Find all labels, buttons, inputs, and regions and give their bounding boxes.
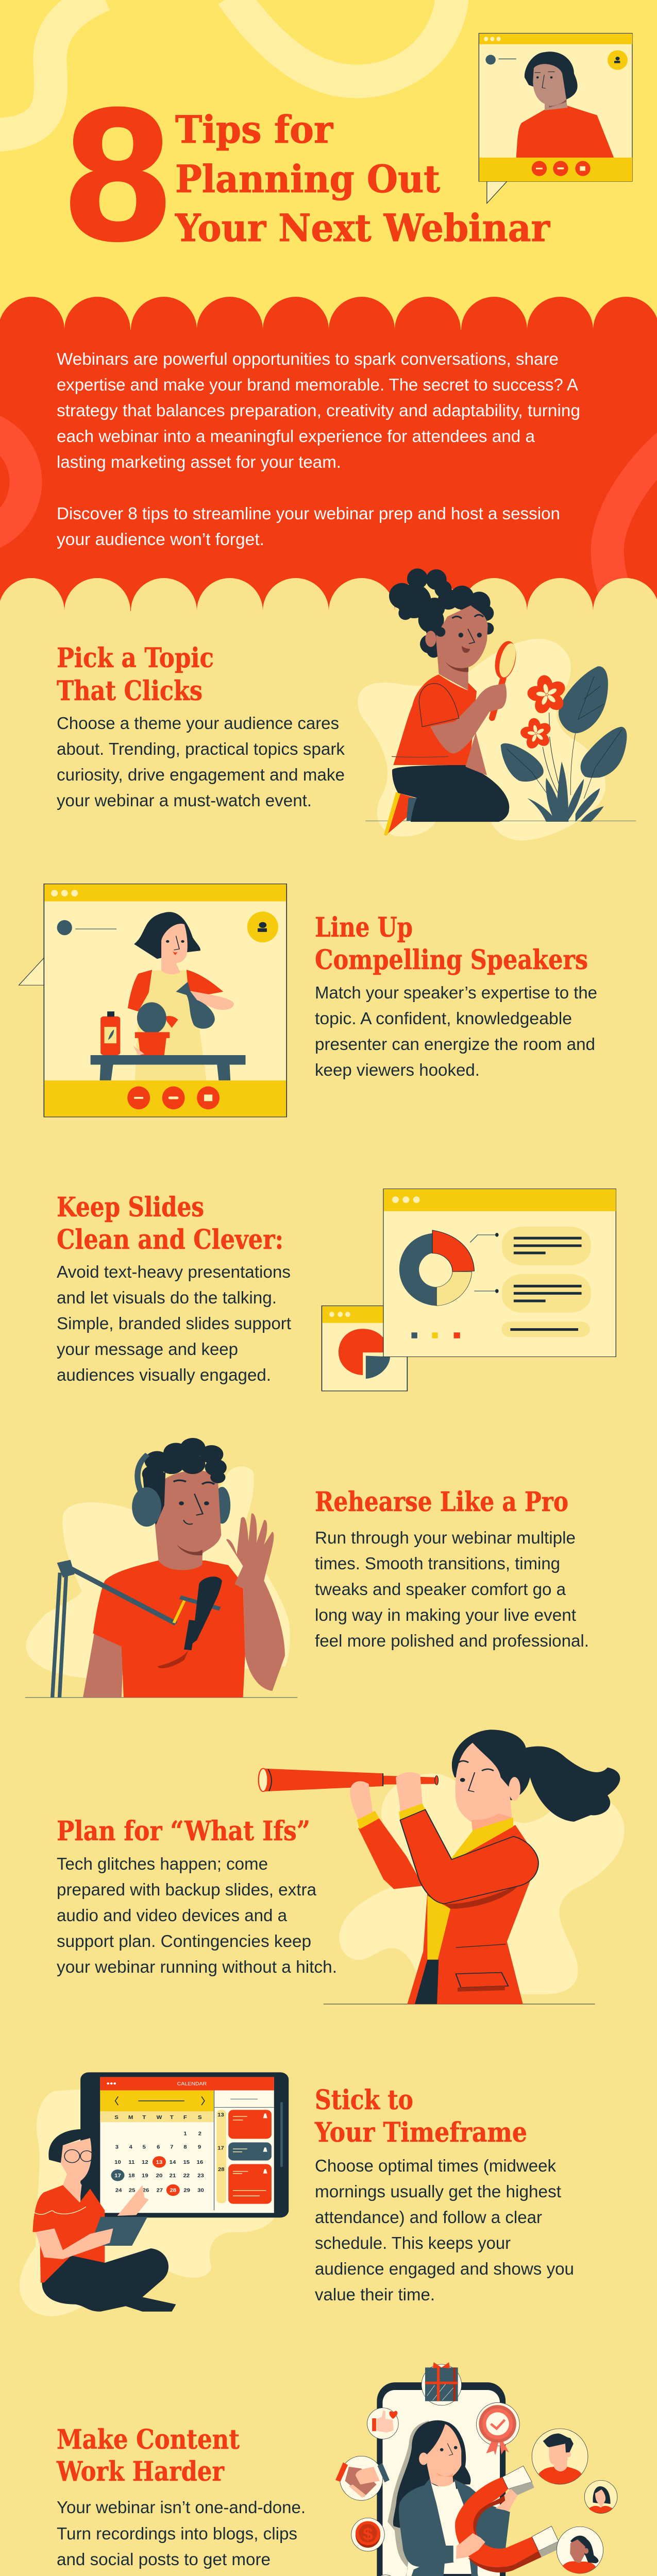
illustration: person with calendar tablet: 28	[218, 2167, 225, 2173]
illustration: person with calendar tablet: 18	[128, 2173, 135, 2179]
illustration: person with calendar tablet: 23	[197, 2173, 204, 2179]
illustration: person with calendar tablet: 13	[156, 2159, 162, 2165]
panel: header	[0, 0, 657, 330]
text: tip 4	[315, 1528, 589, 1650]
illustration: person with calendar tablet: W	[157, 2115, 162, 2121]
illustration: person with calendar tablet: 8	[183, 2144, 187, 2150]
text: tip 5: prepared with backup slides, extra	[57, 1880, 317, 1899]
illustration: person with calendar tablet: 6	[157, 2144, 160, 2150]
heading: tip 5: Plan for “What Ifs”	[57, 1816, 310, 1847]
text: tip 1: your webinar a must-watch event.	[57, 791, 312, 810]
illustration: person with calendar tablet: T	[170, 2115, 174, 2121]
text: tip 3: and let visuals do the talking.	[57, 1288, 277, 1307]
text: tip 5: Tech glitches happen; come	[57, 1854, 268, 1873]
illustration: person with calendar tablet: 30	[197, 2188, 204, 2193]
illustration: person with calendar tablet: 12	[142, 2159, 148, 2165]
icon: attendee man	[532, 2429, 588, 2484]
text: tip 2: topic. A confident, knowledgeable	[315, 1009, 572, 1028]
illustration: person with calendar tablet: T	[142, 2115, 146, 2121]
illustration: woman with magnifier and flowers	[358, 568, 636, 841]
text: tip 3: Avoid text-heavy presentations	[57, 1262, 291, 1281]
intro text	[57, 349, 580, 549]
heading: tip 1	[57, 642, 214, 707]
text: tip 2: keep viewers hooked.	[315, 1060, 480, 1079]
text: tip 5	[57, 1854, 337, 1976]
text: tip 2	[315, 983, 597, 1079]
illustration: person with calendar tablet: 19	[142, 2173, 148, 2179]
heading: tip 1: That Clicks	[57, 675, 203, 707]
intro text: strategy that balances preparation, creativity and adaptability, turning	[57, 401, 580, 420]
illustration: person with calendar tablet: 5	[143, 2144, 146, 2150]
panel: tip 2	[19, 884, 597, 1117]
text: tip 4: long way in making your live event	[315, 1605, 576, 1624]
panel: tip 3	[57, 1189, 616, 1391]
illustration: person with calendar tablet: 17	[114, 2173, 121, 2179]
illustration: person with calendar tablet: 4	[129, 2144, 132, 2150]
text: tip 3	[57, 1262, 291, 1384]
heading: tip 3: Keep Slides	[57, 1192, 204, 1223]
text: tip 2: Match your speaker’s expertise to the	[315, 983, 597, 1002]
title: Planning Out	[175, 157, 440, 201]
icon: video call window with presenter	[479, 33, 632, 204]
text: tip 4: times. Smooth transitions, timing	[315, 1554, 560, 1573]
text: tip 7: and social posts to get more	[57, 2550, 271, 2569]
heading: tip 7: Work Harder	[56, 2456, 225, 2487]
heading: tip 3: Clean and Clever:	[57, 1224, 283, 1256]
text: tip 7	[57, 2498, 306, 2576]
panel: tip 1	[57, 568, 636, 841]
illustration: person with calendar tablet: 15	[183, 2159, 190, 2165]
illustration: person with calendar tablet: 10	[114, 2159, 121, 2165]
illustration: person with calendar tablet: 13	[217, 2112, 224, 2118]
illustration: person with calendar tablet: S	[114, 2115, 119, 2121]
illustration: person with calendar tablet: 7	[170, 2144, 174, 2150]
illustration: woman with magnet on phone	[335, 2362, 617, 2576]
heading: tip 1: Pick a Topic	[57, 642, 214, 674]
text: tip 6: Choose optimal times (midweek	[315, 2156, 557, 2175]
text: tip 6: schedule. This keeps your	[315, 2233, 511, 2252]
text: tip 7: Turn recordings into blogs, clips	[57, 2524, 297, 2543]
intro text: Discover 8 tips to streamline your webinar prep and host a session	[57, 504, 560, 523]
illustration: person with calendar tablet: 16	[197, 2159, 203, 2165]
text: tip 1: curiosity, drive engagement and make	[57, 765, 345, 784]
illustration: man with headphones and microphone	[25, 1438, 297, 1698]
text: tip 5: support plan. Contingencies keep	[57, 1931, 311, 1951]
heading: tip 2: Compelling Speakers	[315, 944, 588, 976]
illustration: person with calendar tablet: 22	[183, 2173, 190, 2179]
text: tip 1: about. Trending, practical topics spark	[57, 739, 345, 758]
text: tip 3: audiences visually engaged.	[57, 1365, 271, 1384]
illustration: person with calendar tablet: 25	[129, 2188, 136, 2193]
illustration: person with calendar tablet: 21	[170, 2173, 176, 2179]
text: tip 4: tweaks and speaker comfort go a	[315, 1580, 566, 1599]
title: Your Next Webinar	[175, 206, 550, 250]
text: tip 4: feel more polished and professional.	[315, 1631, 589, 1650]
title: 8	[65, 70, 170, 279]
intro text: each webinar into a meaningful experience for attendees and a	[57, 427, 535, 446]
intro text: lasting marketing asset for your team.	[57, 452, 341, 471]
icon: gift	[422, 2362, 462, 2405]
illustration: person with calendar tablet: CALENDAR	[177, 2081, 207, 2087]
illustration: person with calendar tablet: S	[198, 2115, 202, 2121]
illustration: person with calendar tablet: 20	[156, 2173, 162, 2179]
heading: tip 6	[314, 2084, 527, 2148]
illustration: presenter with plant in video window	[19, 884, 287, 1117]
illustration: person with calendar tablet: M	[128, 2115, 133, 2121]
illustration: person with calendar tablet: 28	[170, 2188, 176, 2193]
illustration: slide windows with charts	[322, 1189, 616, 1391]
icon: dollar coin: $	[363, 2524, 373, 2544]
illustration: person with calendar tablet: 24	[115, 2188, 122, 2193]
illustration: person with calendar tablet	[20, 2072, 289, 2316]
icon: thumbs up	[367, 2408, 398, 2439]
heading: tip 6: Stick to	[315, 2084, 413, 2116]
text: tip 2: presenter can energize the room and	[315, 1035, 595, 1054]
text: tip 3: Simple, branded slides support	[57, 1314, 291, 1333]
text: tip 6: value their time.	[315, 2285, 435, 2304]
title: Tips for	[175, 108, 333, 152]
icon: gear	[373, 2575, 398, 2576]
illustration: woman with telescope	[259, 1730, 625, 2004]
illustration: person with calendar tablet: F	[183, 2115, 187, 2121]
illustration: person with calendar tablet: 2	[198, 2131, 201, 2137]
text: tip 5: your webinar running without a hitch.	[57, 1957, 337, 1976]
text: tip 1: Choose a theme your audience cares	[57, 714, 339, 733]
icon: attendee woman small	[584, 2480, 617, 2513]
illustration: person with calendar tablet: 29	[183, 2188, 190, 2193]
heading: tip 6: Your Timeframe	[314, 2117, 527, 2148]
scalloped divider	[0, 578, 657, 644]
text: tip 4: Run through your webinar multiple	[315, 1528, 576, 1547]
illustration: person with calendar tablet: 9	[198, 2144, 201, 2150]
icon: handshake	[335, 2456, 390, 2500]
panel: tip 7	[56, 2362, 617, 2576]
icon: attendee woman	[557, 2527, 603, 2573]
illustration: person with calendar tablet: 11	[128, 2159, 134, 2165]
panel: intro	[0, 297, 657, 618]
title	[65, 70, 550, 279]
panel: tip 5	[57, 1730, 625, 2004]
illustration: person with calendar tablet: 26	[143, 2188, 149, 2193]
intro text: your audience won’t forget.	[57, 530, 264, 549]
text: tip 1	[57, 714, 345, 810]
text: tip 5: audio and video devices and a	[57, 1906, 288, 1925]
icon: dollar coin	[351, 2518, 384, 2551]
illustration: person with calendar tablet: 3	[115, 2144, 119, 2150]
illustration: person with calendar tablet: 27	[156, 2188, 163, 2193]
panel: tip 4	[25, 1438, 589, 1698]
intro text: Webinars are powerful opportunities to spark conversations, share	[57, 349, 559, 368]
text: tip 6: mornings usually get the highest	[315, 2182, 561, 2201]
text: tip 6: attendance) and follow a clear	[315, 2208, 542, 2227]
illustration: person with calendar tablet: 1	[183, 2131, 187, 2137]
heading: tip 4: Rehearse Like a Pro	[315, 1486, 568, 1518]
heading: tip 7	[56, 2424, 240, 2487]
illustration: person with calendar tablet: 17	[217, 2145, 224, 2151]
intro text: expertise and make your brand memorable. The secret to success? A	[57, 375, 578, 394]
text: tip 7: Your webinar isn’t one-and-done.	[57, 2498, 306, 2517]
text: tip 6	[315, 2156, 574, 2304]
heading: tip 2: Line Up	[315, 912, 413, 943]
illustration: person with calendar tablet: 14	[170, 2159, 176, 2165]
text: tip 6: audience engaged and shows you	[315, 2259, 574, 2278]
heading: tip 3	[57, 1192, 283, 1256]
icon: rosette badge	[477, 2402, 519, 2455]
text: tip 3: your message and keep	[57, 1340, 238, 1359]
panel: tip 6	[20, 2072, 574, 2316]
heading: tip 7: Make Content	[57, 2424, 240, 2455]
heading: tip 2	[315, 912, 588, 976]
